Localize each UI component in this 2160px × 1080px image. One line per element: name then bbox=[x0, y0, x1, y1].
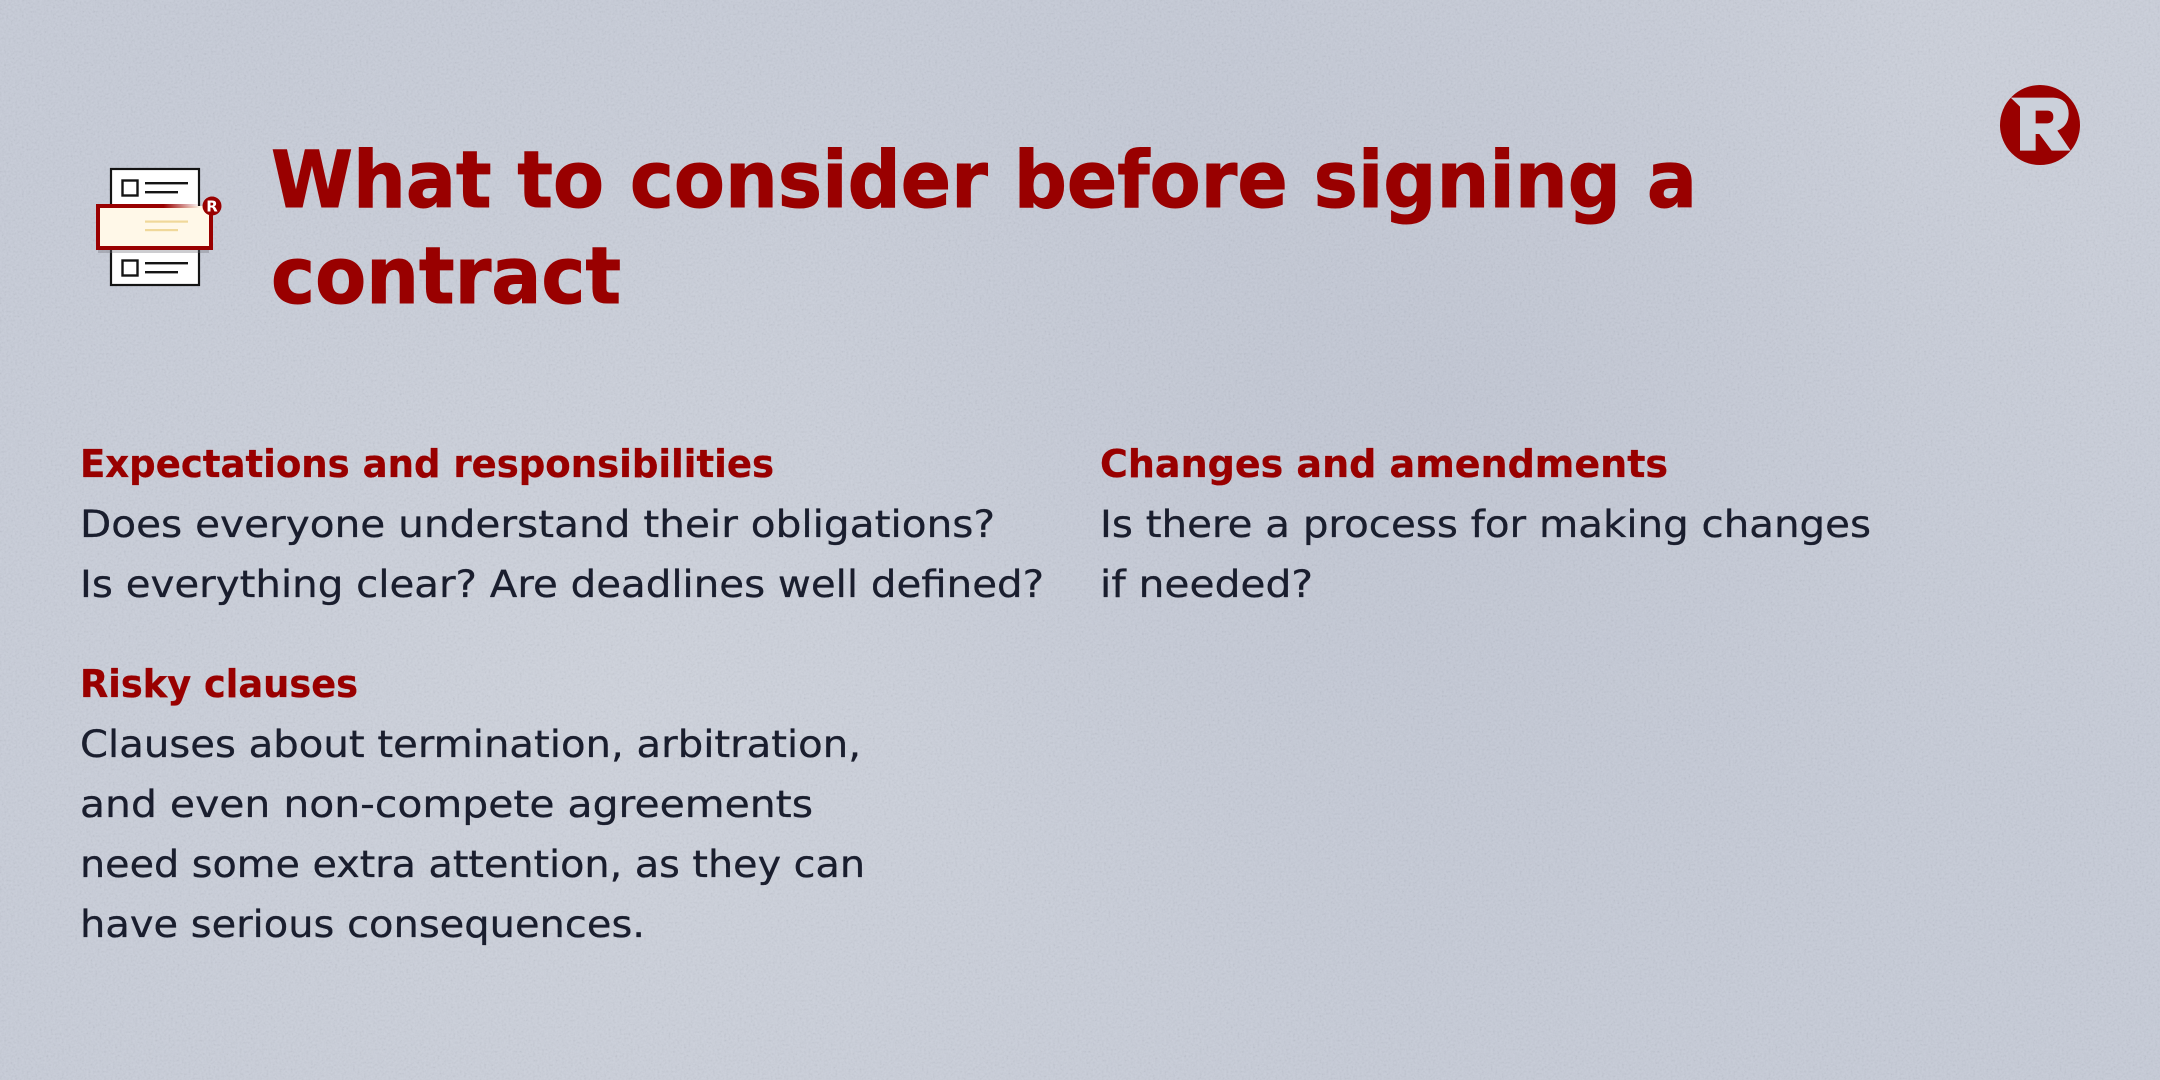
text block: risky clauses: Clauses about termination, arbitration, bbox=[80, 722, 861, 766]
text block: risky clauses: Risky clauses bbox=[80, 662, 358, 706]
text block: expectations and responsibilities: Is everything clear? Are deadlines well defined? bbox=[80, 562, 1044, 606]
title bbox=[271, 136, 1697, 322]
title: What to consider before signing a bbox=[271, 136, 1697, 226]
icon: contract document bbox=[96, 169, 222, 285]
text block: changes and amendments: if needed? bbox=[1100, 562, 1313, 606]
text block: risky clauses: and even non-compete agreements bbox=[80, 782, 813, 826]
text block: expectations and responsibilities bbox=[80, 442, 1044, 606]
title: contract bbox=[271, 232, 621, 322]
text block: changes and amendments bbox=[1100, 442, 1871, 606]
text block: risky clauses: have serious consequences. bbox=[80, 902, 645, 946]
text block: risky clauses: need some extra attention, as they can bbox=[80, 842, 865, 886]
text block: risky clauses bbox=[80, 662, 865, 946]
logo: R mark bbox=[2000, 85, 2080, 165]
text block: changes and amendments: Changes and amendments bbox=[1100, 442, 1668, 486]
text block: changes and amendments: Is there a process for making changes bbox=[1100, 502, 1871, 546]
icon: contract document: R bbox=[206, 198, 218, 216]
text block: expectations and responsibilities: Does everyone understand their obligations? bbox=[80, 502, 995, 546]
text block: expectations and responsibilities: Expectations and responsibilities bbox=[80, 442, 774, 486]
